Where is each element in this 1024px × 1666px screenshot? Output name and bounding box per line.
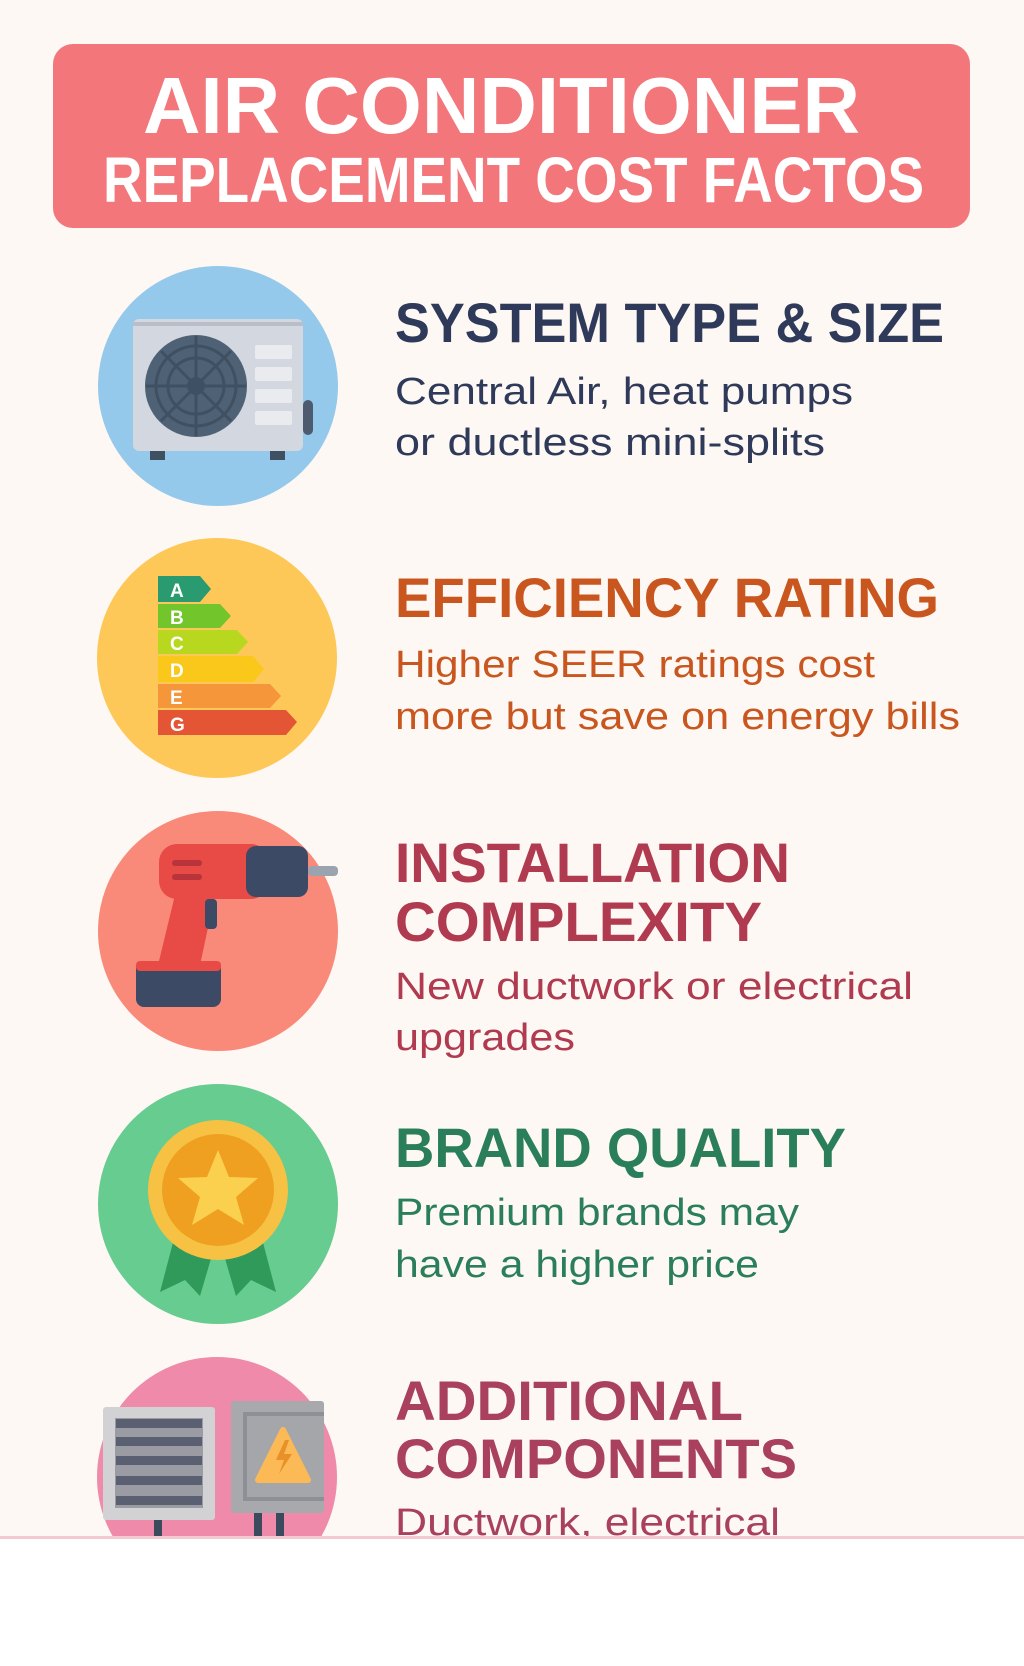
section 5 text: ADDITIONAL [395, 1369, 743, 1432]
section 4 text [395, 1116, 846, 1286]
section 3 text: INSTALLATION [395, 831, 790, 894]
section 2 text: EFFICIENCY RATING [395, 566, 939, 629]
icon: energy rating: B [170, 608, 184, 629]
section 1 text [395, 291, 944, 464]
title banner: AIR CONDITIONER [143, 61, 860, 150]
title banner [53, 44, 970, 228]
icon: medal [98, 1084, 338, 1324]
icon: components [97, 1357, 337, 1536]
section 5 text: Ductwork, electrical [395, 1502, 780, 1544]
section 2 text [395, 566, 960, 738]
icon: energy rating: G [170, 715, 185, 736]
section 1 text: SYSTEM TYPE & SIZE [395, 291, 944, 354]
section 1 text: or ductless mini-splits [395, 422, 825, 464]
section 3 text: COMPLEXITY [395, 890, 762, 953]
section 4 text: have a higher price [395, 1244, 759, 1286]
icon: energy rating: C [170, 634, 184, 655]
section 3 text: New ductwork or electrical [395, 966, 913, 1008]
icon: drill [98, 811, 338, 1051]
icon: energy rating: A [170, 581, 184, 602]
section 2 text: Higher SEER ratings cost [395, 644, 875, 686]
icon: energy rating: E [170, 688, 183, 709]
section 4 text: BRAND QUALITY [395, 1116, 846, 1179]
section 1 text: Central Air, heat pumps [395, 371, 853, 413]
section 5 text [396, 1381, 795, 1536]
section 3 text [395, 831, 913, 1059]
icon: energy rating: D [170, 661, 184, 682]
section 4 text: Premium brands may [395, 1192, 799, 1234]
section 5 text: COMPONENTS [395, 1427, 797, 1490]
icon: AC unit [98, 266, 338, 506]
section 2 text: more but save on energy bills [395, 696, 960, 738]
section 3 text: upgrades [395, 1017, 575, 1059]
icon: energy rating [97, 538, 337, 778]
